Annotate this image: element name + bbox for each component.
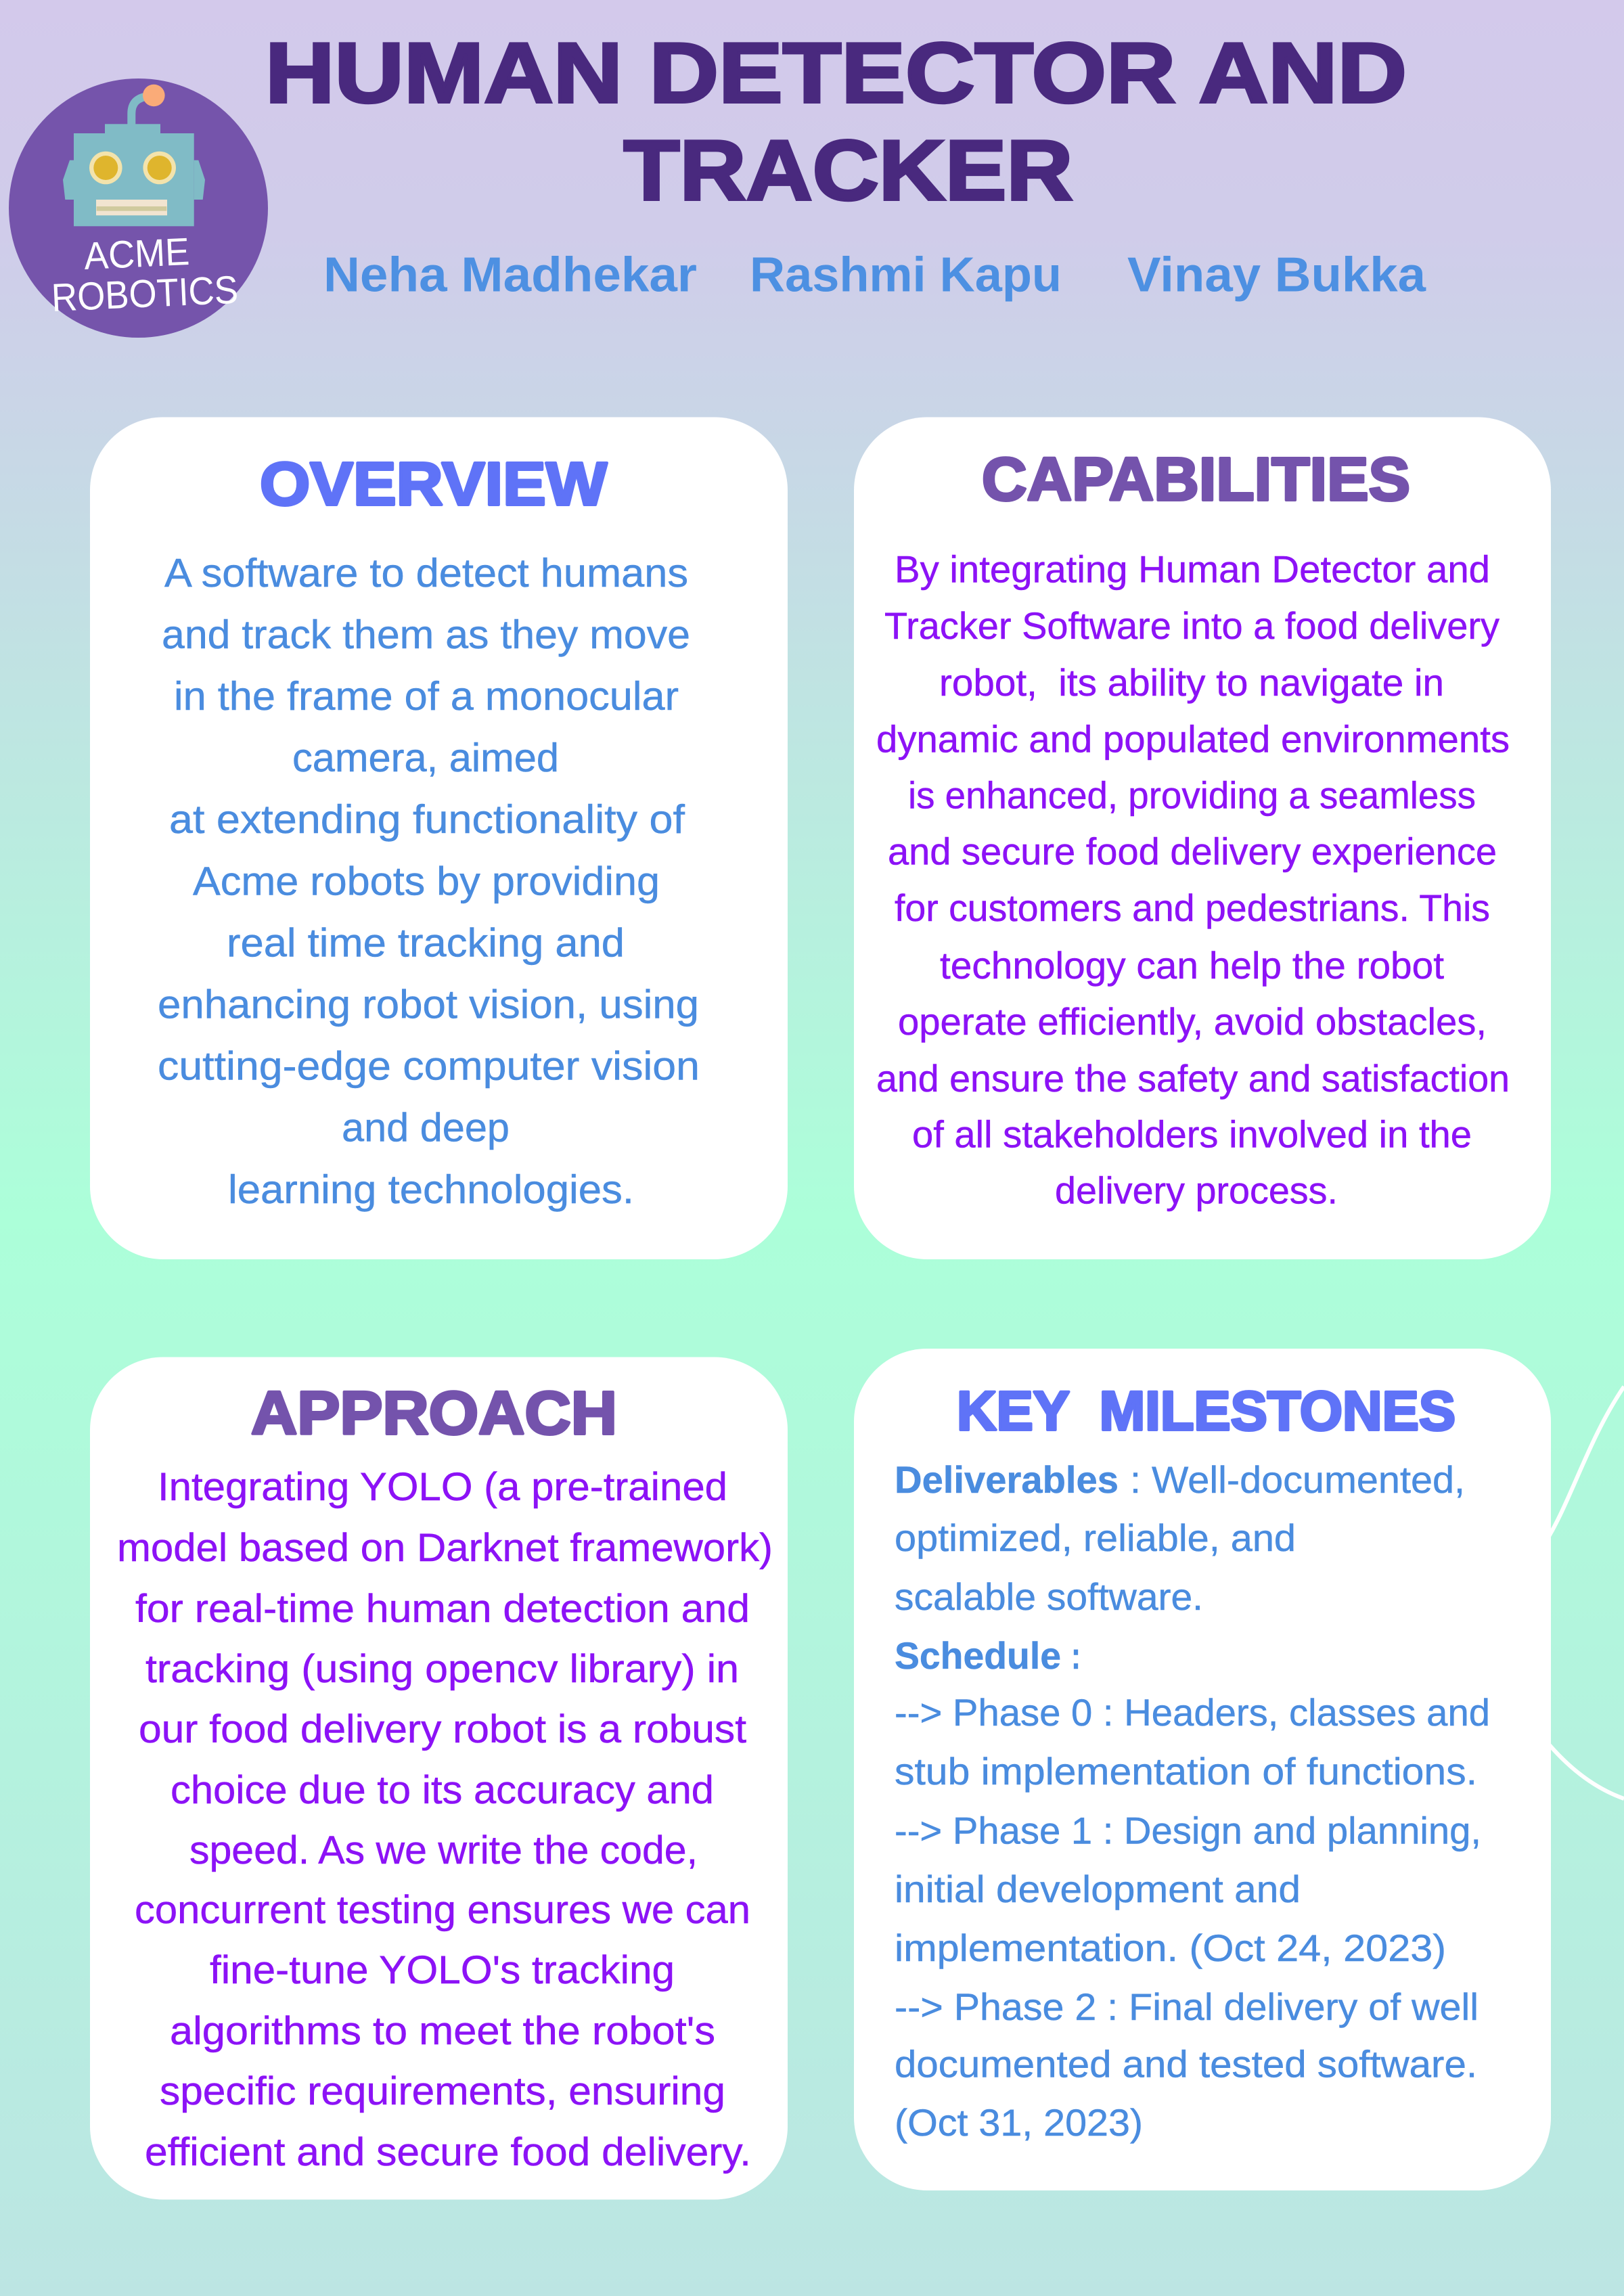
text: approach body: tracking (using opencv library) in xyxy=(145,1647,739,1691)
text: overview body: and deep xyxy=(342,1106,510,1150)
text: capabilities body: operate efficiently, avoid obstacles, xyxy=(898,1000,1487,1043)
text: milestones body: Deliverables xyxy=(895,1458,1119,1501)
text: milestones body: --> Phase 1 : Design and planning, xyxy=(895,1809,1481,1851)
text: overview body: at extending functionality of xyxy=(169,797,685,842)
text: capabilities body: dynamic and populated environments xyxy=(876,717,1510,761)
text: approach body: speed. As we write the code, xyxy=(189,1828,698,1872)
text: capabilities body: delivery process. xyxy=(1055,1169,1338,1211)
text: approach body: fine-tune YOLO's tracking xyxy=(210,1948,675,1992)
text: approach body: for real-time human detection and xyxy=(135,1587,750,1631)
text: milestones body: : Well-documented, xyxy=(1130,1458,1465,1501)
authors: Vinay Bukka xyxy=(1127,248,1426,302)
panel: approach xyxy=(90,1357,788,2199)
text: capabilities body: Tracker Software into a food delivery xyxy=(884,604,1499,647)
text: milestones body: --> Phase 0 : Headers, classes and xyxy=(895,1691,1490,1734)
text: overview body xyxy=(158,551,700,1212)
logo text: ROBOTICS xyxy=(51,268,239,320)
text: approach body xyxy=(117,1465,773,2174)
text: overview body: camera, aimed xyxy=(292,736,559,780)
text: capabilities body: technology can help the robot xyxy=(940,944,1444,987)
text: capabilities body: of all stakeholders involved in the xyxy=(912,1112,1472,1156)
text: milestones body: documented and tested software. xyxy=(895,2042,1477,2086)
logo: Acme Robotics xyxy=(9,78,268,338)
text: milestones body: scalable software. xyxy=(895,1575,1203,1618)
panel: capabilities xyxy=(854,417,1551,1259)
text: approach body: specific requirements, ensuring xyxy=(160,2069,725,2113)
text: capabilities body: for customers and pedestrians. This xyxy=(895,886,1490,929)
text: milestones body: --> Phase 2 : Final delivery of well xyxy=(895,1985,1479,2028)
text: approach body: algorithms to meet the robot's xyxy=(170,2009,715,2053)
text: overview body: Acme robots by providing xyxy=(193,859,660,904)
text: approach body: efficient and secure food delivery. xyxy=(145,2130,751,2174)
text: milestones body: stub implementation of functions. xyxy=(895,1750,1477,1793)
text: approach body: model based on Darknet framework) xyxy=(117,1526,773,1570)
text: milestones body xyxy=(895,1458,1490,2144)
text: milestones body: : xyxy=(1071,1634,1081,1677)
title: TRACKER xyxy=(624,122,1073,218)
text: capabilities body: and secure food delivery experience xyxy=(888,830,1497,873)
authors: Rashmi Kapu xyxy=(750,248,1062,302)
text: overview body: cutting-edge computer vision xyxy=(158,1043,700,1088)
heading: overview: OVERVIEW xyxy=(260,451,607,518)
title xyxy=(265,25,1407,218)
text: milestones body: (Oct 31, 2023) xyxy=(895,2101,1143,2144)
text: overview body: enhancing robot vision, using xyxy=(158,983,699,1027)
text: approach body: our food delivery robot is a robust xyxy=(139,1707,746,1751)
text: milestones body: implementation. (Oct 24, 2023) xyxy=(895,1927,1446,1969)
text: approach body: concurrent testing ensures we can xyxy=(135,1888,750,1932)
text: overview body: A software to detect humans xyxy=(164,551,688,595)
logo text xyxy=(51,230,239,320)
text: overview body: learning technologies. xyxy=(228,1167,634,1212)
text: capabilities body: robot, its ability to navigate in xyxy=(939,661,1444,704)
title: HUMAN DETECTOR AND xyxy=(265,25,1407,120)
panel: key milestones xyxy=(854,1349,1551,2190)
text: overview body: in the frame of a monocular xyxy=(174,674,679,719)
heading: key milestones: KEY MILESTONES xyxy=(957,1380,1456,1442)
text: milestones body: initial development and xyxy=(895,1868,1301,1910)
text: milestones body: optimized, reliable, and xyxy=(895,1516,1296,1559)
text: capabilities body xyxy=(876,548,1510,1211)
text: approach body: choice due to its accuracy and xyxy=(171,1768,714,1812)
heading: approach: APPROACH xyxy=(251,1380,617,1447)
logo text: ACME xyxy=(83,230,190,278)
authors: Neha Madhekar xyxy=(323,248,697,302)
text: capabilities body: and ensure the safety and satisfaction xyxy=(876,1057,1510,1100)
icon: robot head xyxy=(63,85,205,226)
heading: capabilities: CAPABILITIES xyxy=(982,446,1410,514)
text: overview body: real time tracking and xyxy=(227,920,625,965)
text: overview body: and track them as they move xyxy=(162,612,690,657)
panel: overview xyxy=(90,417,788,1259)
text: milestones body: Schedule xyxy=(895,1634,1061,1677)
text: capabilities body: is enhanced, providing a seamless xyxy=(908,774,1476,816)
text: approach body: Integrating YOLO (a pre-trained xyxy=(158,1465,727,1509)
text: capabilities body: By integrating Human Detector and xyxy=(895,548,1490,590)
authors xyxy=(323,248,1426,302)
